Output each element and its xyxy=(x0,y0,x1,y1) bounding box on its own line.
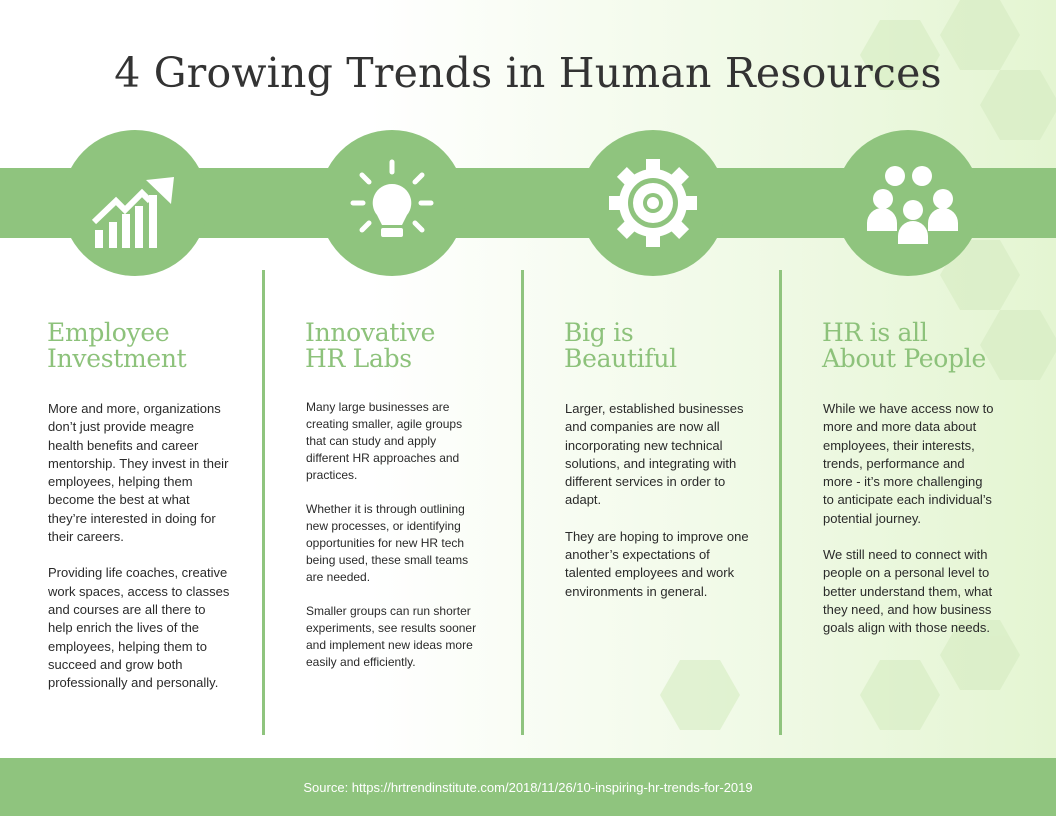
column 2 text xyxy=(306,400,476,669)
column 4 heading: About People xyxy=(822,344,986,373)
column 1 heading xyxy=(47,318,186,373)
column 4 text: While we have access now to more and more data about employees, their interests, trends, performance and more - it’s more challenging to anticipate each individual’s potential journey. xyxy=(823,401,994,526)
column 3 text xyxy=(565,401,749,599)
column 1 text xyxy=(48,401,229,690)
icon circle: growth chart xyxy=(62,130,208,276)
column 2 heading: Innovative xyxy=(305,318,435,347)
dividers xyxy=(262,270,265,735)
column 1 heading: Investment xyxy=(47,344,186,373)
icon circle: lightbulb xyxy=(319,130,465,276)
column 2 heading xyxy=(305,318,435,373)
column 3 heading xyxy=(564,318,677,373)
icon circle: people xyxy=(835,130,981,276)
column 3 heading: Beautiful xyxy=(564,344,677,373)
green band xyxy=(0,168,1056,238)
footer source: Source: https://hrtrendinstitute.com/2018/11/26/10-inspiring-hr-trends-for-2019 xyxy=(303,780,753,795)
column 4 heading: HR is all xyxy=(822,318,928,347)
column 1 text: Providing life coaches, creative work spaces, access to classes and courses are all there to help enrich the lives of the employees, helping them to succeed and grow both professionally and personally. xyxy=(48,565,229,690)
title: 4 Growing Trends in Human Resources xyxy=(114,49,942,97)
column 4 text: We still need to connect with people on a personal level to better understand them, what they need, and how business goals align with those needs. xyxy=(823,547,992,635)
column 1 heading: Employee xyxy=(47,318,169,347)
column 2 text: Smaller groups can run shorter experiments, see results sooner and implement new ideas more easily and efficiently. xyxy=(306,604,476,669)
column 2 text: Many large businesses are creating smaller, agile groups that can study and apply different HR approaches and practices. xyxy=(306,400,462,482)
column 2 heading: HR Labs xyxy=(305,344,412,373)
column 1 text: More and more, organizations don’t just provide meagre health benefits and career mentorship. They invest in their employees, helping them become the best at what they’re interested in doing for their careers. xyxy=(48,401,228,544)
column 3 heading: Big is xyxy=(564,318,633,347)
column 2 text: Whether it is through outlining new processes, or identifying opportunities for new HR tech being used, these small teams are needed. xyxy=(306,502,468,584)
footer source xyxy=(0,758,1056,816)
column 3 text: Larger, established businesses and companies are now all incorporating new technical solutions, and integrating with different services in order to adapt. xyxy=(565,401,744,507)
column 3 text: They are hoping to improve one another’s expectations of talented employees and work environments in general. xyxy=(565,529,749,599)
column 4 heading xyxy=(822,318,986,373)
icon circle: gear xyxy=(580,130,726,276)
column 4 text xyxy=(823,401,994,635)
